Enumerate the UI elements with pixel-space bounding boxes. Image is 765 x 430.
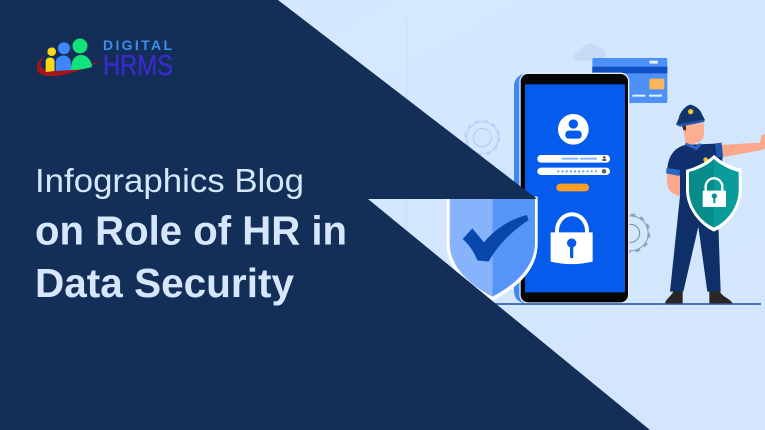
icon: credit card xyxy=(592,58,667,103)
guard pants xyxy=(670,196,721,292)
title xyxy=(35,162,347,306)
illustration: security guard xyxy=(665,105,765,303)
title line 3: Data Security xyxy=(35,260,294,306)
icon: user avatar xyxy=(558,114,589,145)
icon: left gear xyxy=(465,121,499,155)
phone screen xyxy=(525,84,625,292)
title line 2: on Role of HR in xyxy=(35,207,347,253)
check mark xyxy=(463,215,529,262)
logo wordmark xyxy=(103,37,173,82)
guard shoes xyxy=(665,291,733,303)
icon: shield with check xyxy=(447,197,538,301)
guard hat xyxy=(676,105,705,127)
shield padlock xyxy=(703,178,726,207)
title line 1: Infographics Blog xyxy=(35,162,304,199)
guard head xyxy=(683,123,704,149)
password field xyxy=(537,168,610,175)
guard hair xyxy=(682,124,686,131)
username field xyxy=(537,155,610,163)
phone xyxy=(514,73,629,303)
logo swoosh xyxy=(37,55,102,76)
icon: right gear xyxy=(612,215,649,252)
illustration: phone login scene xyxy=(447,44,667,303)
logo people xyxy=(46,38,92,72)
logo wordmark: DIGITAL xyxy=(103,37,172,53)
icon: padlock xyxy=(551,214,593,264)
logo xyxy=(37,37,173,82)
icon: cloud xyxy=(573,44,606,61)
ground line xyxy=(495,303,761,305)
login button xyxy=(556,184,589,191)
guard outstretched arm xyxy=(721,134,765,157)
icon: teal shield with lock xyxy=(686,155,742,232)
guard arm xyxy=(667,173,688,196)
logo wordmark: HRMS xyxy=(103,50,173,82)
guard shirt xyxy=(666,143,723,200)
